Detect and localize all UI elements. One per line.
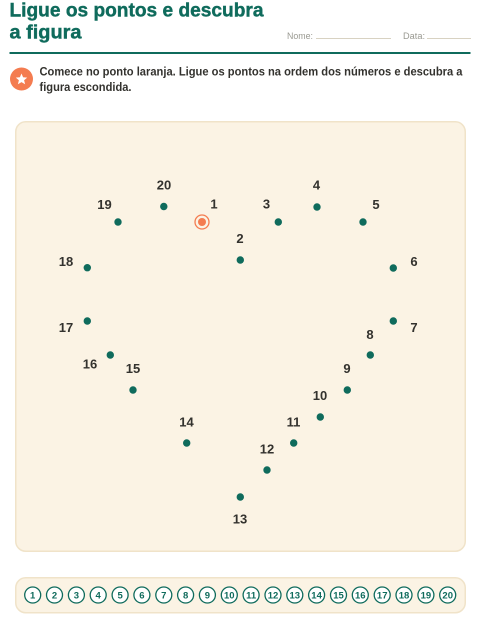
title: [10, 0, 264, 44]
number strip circles: [25, 587, 456, 603]
number strip labels: 6: [139, 590, 145, 601]
dot number labels: 18: [59, 254, 73, 269]
number strip labels: 1: [30, 590, 36, 601]
number strip labels: 19: [421, 590, 431, 601]
number strip labels: 17: [377, 590, 387, 601]
dot number labels: 14: [179, 414, 194, 430]
dot number labels: 15: [126, 361, 140, 376]
number strip labels: 15: [333, 590, 344, 601]
dot number labels: 20: [157, 178, 171, 192]
start dot 1: [195, 215, 209, 229]
name and date fields: [287, 31, 471, 41]
dot number labels: 11: [287, 414, 300, 430]
dot number labels: 3: [263, 196, 270, 212]
number strip labels: 9: [205, 590, 210, 601]
instruction text: figura escondida.: [40, 80, 132, 94]
number strip labels: 18: [399, 590, 409, 601]
number strip labels: 13: [290, 590, 300, 601]
dot number labels: 2: [236, 231, 244, 246]
dot number labels: 6: [410, 254, 418, 269]
number strip labels: 11: [246, 590, 257, 601]
instruction: [10, 64, 463, 94]
dot number labels: 7: [410, 320, 418, 335]
instruction text: [40, 64, 463, 94]
title: Ligue os pontos e descubra: [10, 0, 264, 22]
number strip labels: 20: [442, 590, 453, 601]
panel: number strip: [16, 578, 465, 613]
icon: star badge: [10, 68, 33, 90]
dot number labels: 16: [83, 356, 97, 372]
name and date fields: Nome:: [287, 31, 313, 41]
dot number labels: [59, 178, 418, 526]
number strip labels: 10: [224, 590, 235, 601]
number strip labels: 4: [96, 590, 102, 601]
number strip labels: 2: [52, 590, 57, 601]
number strip labels: 3: [74, 590, 79, 601]
dot number labels: 10: [313, 388, 327, 403]
dot number labels: 4: [313, 178, 321, 192]
dots: [84, 203, 397, 501]
dot number labels: 1: [210, 196, 218, 212]
dot number labels: 5: [372, 197, 380, 212]
dot number labels: 13: [233, 512, 247, 526]
panel: dot-to-dot puzzle: [16, 122, 465, 551]
dot number labels: 17: [59, 320, 73, 335]
dot number labels: 19: [97, 197, 112, 212]
title: a figura: [10, 22, 82, 44]
number strip labels: 12: [268, 590, 278, 601]
dot number labels: 12: [260, 442, 274, 456]
number strip labels: 5: [117, 590, 123, 601]
number strip labels: 14: [311, 590, 323, 601]
name and date fields: Data:: [403, 31, 425, 41]
dot number labels: 9: [343, 361, 351, 376]
number strip labels: 8: [183, 590, 188, 601]
number strip labels: [30, 590, 453, 601]
number strip labels: 7: [161, 590, 166, 601]
dot number labels: 8: [366, 327, 374, 342]
number strip labels: 16: [355, 590, 366, 601]
